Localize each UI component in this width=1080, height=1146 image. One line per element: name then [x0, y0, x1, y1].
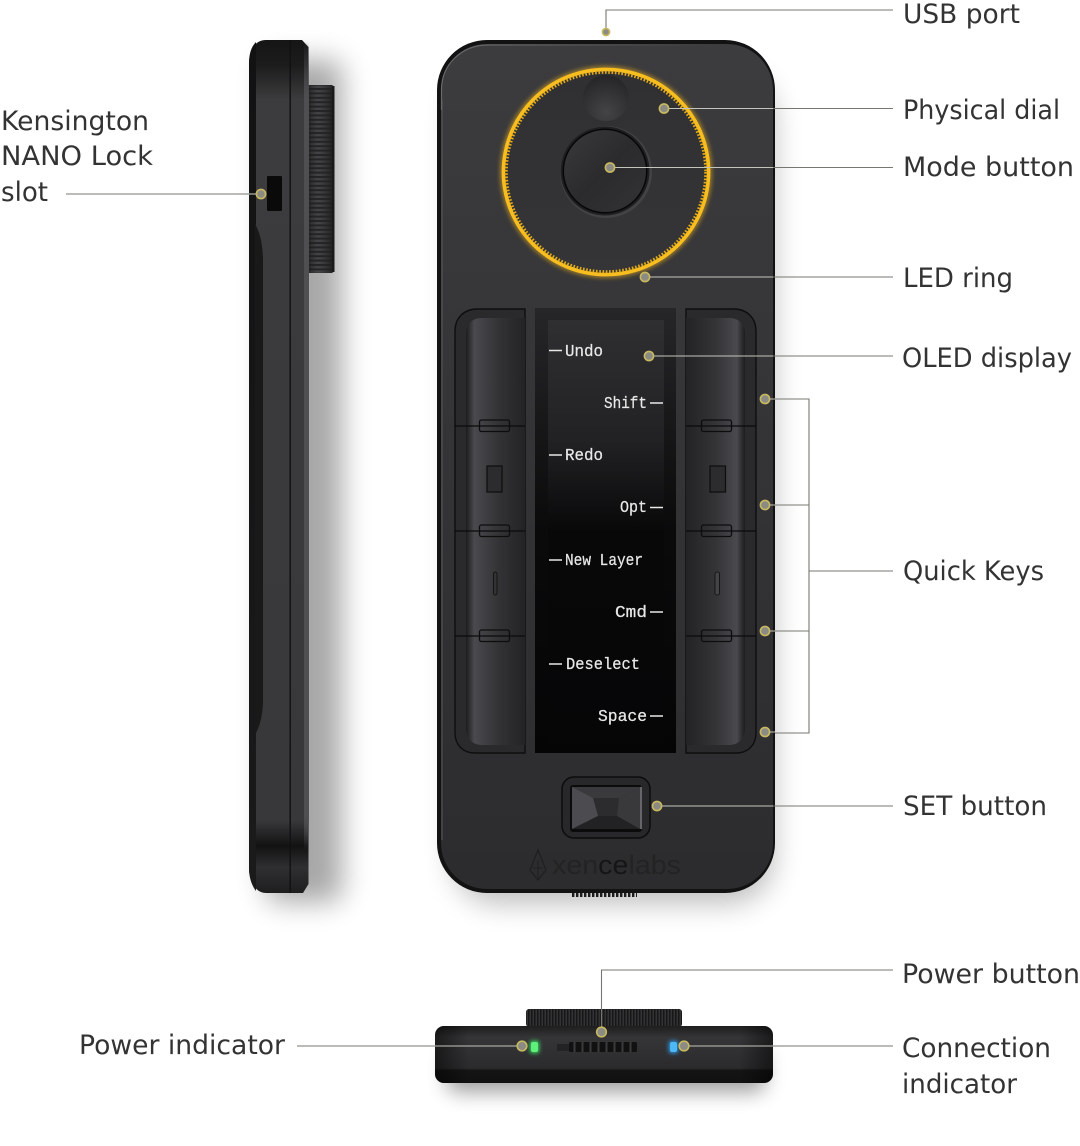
OLED labels: Space [598, 708, 647, 727]
OLED labels: Opt [620, 499, 647, 518]
SET button [562, 777, 650, 838]
callout: Kensington NANO Lock slot: slot [1, 177, 48, 208]
callout: Connection indicator [679, 1033, 1051, 1100]
OLED labels [549, 343, 663, 727]
LED ring and physical dial [502, 68, 710, 276]
callout: Connection indicator: indicator [902, 1069, 1017, 1100]
bottom edge view of device [435, 1009, 773, 1092]
right quick keys [686, 309, 756, 753]
bottom body [435, 1026, 773, 1083]
callout: SET button [652, 791, 1047, 822]
callout: Kensington NANO Lock slot: Kensington [1, 106, 149, 137]
callout: LED ring: LED ring [903, 263, 1013, 294]
callout: Power indicator [79, 1030, 527, 1061]
green power LED [530, 1041, 539, 1053]
callout: Kensington NANO Lock slot: NANO Lock [1, 141, 154, 172]
OLED display [535, 308, 676, 753]
Kensington lock slot [267, 176, 282, 211]
side body [249, 40, 308, 893]
callout: OLED display: OLED display [902, 343, 1072, 374]
OLED labels: Redo [565, 447, 603, 466]
OLED labels: Shift [604, 395, 647, 414]
OLED labels: Deselect [566, 656, 640, 675]
callout: Kensington NANO Lock slot [1, 106, 266, 208]
left quick keys [455, 309, 525, 753]
callout: OLED display [644, 343, 1072, 374]
callout: Mode button: Mode button [903, 152, 1074, 183]
callout: Power button [597, 959, 1080, 1037]
callout: Power indicator: Power indicator [79, 1030, 285, 1061]
OLED labels: New Layer [565, 552, 643, 571]
power switch [557, 1042, 637, 1052]
mode button [560, 126, 652, 218]
side view of device [249, 40, 342, 902]
bottom dial [526, 1009, 682, 1027]
callout: Power button: Power button [902, 959, 1080, 990]
callout: USB port [602, 0, 1020, 36]
callout: Physical dial: Physical dial [903, 95, 1060, 126]
callout: Quick Keys bracket [760, 394, 1044, 737]
callout: LED ring [640, 263, 1013, 294]
device body [437, 40, 775, 893]
blue connection LED [669, 1041, 678, 1053]
Xencelabs logo: xencelabs [552, 850, 681, 880]
callout: Physical dial [659, 95, 1060, 126]
callout: SET button: SET button [903, 791, 1047, 822]
OLED labels: Cmd [615, 604, 647, 623]
front view of device [437, 40, 775, 904]
callout: Quick Keys bracket: Quick Keys [903, 556, 1044, 587]
dial finger dimple [583, 75, 629, 121]
OLED labels: Undo [565, 343, 603, 362]
bottom power button teeth [572, 892, 637, 897]
callout: Mode button [605, 152, 1074, 183]
callout: Connection indicator: Connection [902, 1033, 1051, 1064]
side dial [305, 85, 334, 273]
